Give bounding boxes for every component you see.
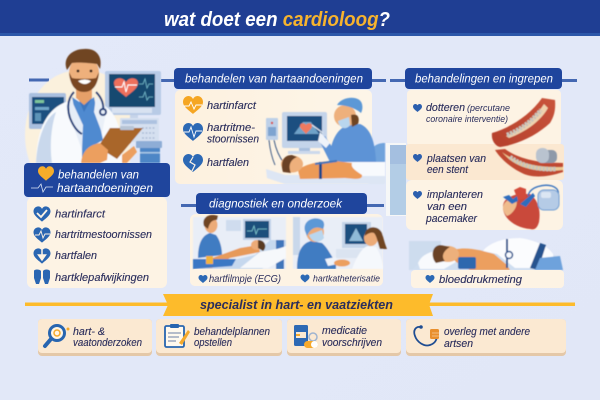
item: hartfalen: hartfalen	[55, 250, 97, 262]
item: plaatsen van een stent	[426, 153, 486, 176]
wall unit and cables	[266, 118, 278, 140]
left monitor	[29, 93, 66, 129]
scan monitor	[342, 222, 371, 248]
wall chart	[226, 220, 241, 231]
icon: stethoscope and folder	[414, 325, 439, 345]
medical cart	[120, 115, 162, 163]
icon: medication	[294, 325, 318, 348]
icon: heart	[300, 274, 310, 283]
illustration: blood pressure measurement	[409, 238, 563, 270]
item: dotteren: dotteren	[426, 102, 465, 114]
item: hartfalen: hartfalen	[207, 157, 249, 169]
item: dotteren: coronaire interventie)	[426, 114, 508, 125]
face	[69, 56, 99, 90]
icon: heart	[413, 104, 422, 112]
item: hartinfarct: hartinfarct	[207, 100, 257, 112]
heading: behandelen van hartaandoeningen	[174, 68, 372, 89]
header band	[0, 0, 600, 36]
card: medicatie voorschrijven	[287, 319, 401, 356]
heading: diagnostiek en onderzoek	[196, 193, 367, 214]
illustration: artery with balloon	[492, 98, 555, 147]
item: hartritmestoornissen: hartritmestoornissen	[55, 229, 152, 241]
icon: heart	[413, 191, 422, 199]
icon: magnifier	[45, 326, 70, 346]
icon: heart with arrow	[34, 248, 50, 264]
item: hartritme-stoornissen: hartritme-	[207, 122, 255, 134]
item: hartinfarct: hartinfarct	[55, 208, 106, 220]
icon: valves	[34, 270, 50, 284]
item: implanteren van een pacemaker	[425, 189, 483, 225]
doctor coat	[36, 97, 122, 163]
item: implanteren van een pacemaker: van een	[427, 201, 467, 213]
heading: behandelingen en ingrepen: behandelingen en ingrepen	[415, 72, 553, 86]
card: hart- en vaatonderzoken: hart- &	[73, 326, 105, 338]
heart monitor	[105, 71, 161, 115]
panel: left conditions list	[27, 197, 167, 288]
icon: orange heart	[183, 96, 203, 114]
nurse	[352, 246, 383, 269]
item: plaatsen van een stent: plaatsen van	[426, 153, 486, 165]
title box: behandelen van hartaandoeningen: hartaandoeningen	[57, 181, 153, 195]
connector lines	[29, 78, 577, 207]
ECG monitor	[243, 219, 271, 240]
patient	[298, 161, 362, 179]
beard	[69, 72, 99, 92]
item: dotteren: (percutane	[467, 103, 510, 114]
doctor	[297, 241, 336, 269]
panel: behandelingen en ingrepen	[406, 90, 564, 230]
title box: behandelen van hartaandoeningen: behandelen van	[58, 168, 139, 182]
card: overleg met andere artsen: artsen	[444, 338, 473, 350]
icon: clipboard with pencil	[165, 324, 190, 347]
icon: heart	[198, 275, 208, 283]
illustration: ECG scene	[193, 215, 286, 269]
title: wat doet een cardioloog?	[164, 8, 390, 31]
icon: blue heart	[183, 123, 203, 141]
item: hartklepafwijkingen: hartklepafwijkingen	[55, 272, 149, 284]
card: overleg met andere artsen: overleg met andere	[444, 326, 530, 338]
patient	[448, 248, 510, 270]
title box: behandelen van hartaandoeningen	[24, 163, 170, 197]
hands	[81, 143, 108, 163]
illustration: echo on patient	[266, 98, 385, 184]
bed	[266, 169, 385, 184]
coat lapels	[66, 97, 83, 150]
bed	[193, 240, 286, 269]
hair	[66, 49, 101, 70]
doctor coat	[483, 238, 555, 268]
panel: blue wall accent	[386, 143, 406, 216]
patient	[193, 245, 260, 268]
icon: heart with check	[34, 206, 50, 222]
heading: behandelingen en ingrepen	[405, 68, 562, 89]
caption: hartkatheterisatie: hartkatheterisatie	[313, 274, 380, 284]
eyes	[77, 70, 92, 72]
neck	[76, 85, 92, 105]
hands	[334, 260, 350, 266]
icon: heart	[426, 275, 434, 283]
card: medicatie voorschrijven: medicatie	[322, 325, 367, 337]
item: hartritme-stoornissen: stoornissen	[207, 134, 259, 146]
item: implanteren van een pacemaker: implanteren	[427, 189, 483, 201]
banner: specialist in hart- en vaatziekten: specialist in hart- en vaatziekten	[200, 298, 393, 312]
card: medicatie voorschrijven: voorschrijven	[322, 337, 382, 349]
icon: heart with pulse	[34, 227, 50, 243]
clipboard	[98, 128, 143, 159]
card: behandelplannen opstellen	[156, 319, 282, 356]
stethoscope	[68, 92, 103, 134]
card: behandelplannen opstellen: opstellen	[194, 337, 232, 349]
banner: specialist in hart- en vaatziekten	[25, 294, 575, 316]
icon: heart	[413, 154, 422, 162]
item: plaatsen van een stent: een stent	[427, 164, 469, 176]
card: behandelplannen opstellen: behandelplannen	[194, 326, 270, 338]
panel: behandelen van hartaandoeningen	[175, 90, 385, 184]
cream circle backdrop	[25, 70, 130, 163]
surgeon body	[329, 124, 376, 162]
surgeon head	[334, 105, 356, 127]
illustration: cardiologist with monitors	[25, 49, 162, 163]
panel: diagnostiek en onderzoek	[190, 214, 387, 286]
illustration: heart with pacemaker	[503, 185, 559, 229]
item: dotteren	[426, 102, 510, 125]
stethoscope	[506, 239, 508, 268]
item: implanteren van een pacemaker: pacemaker	[425, 213, 478, 225]
caption bar	[190, 269, 383, 286]
chair	[368, 143, 385, 163]
heading: diagnostiek en onderzoek: diagnostiek en onderzoek	[209, 196, 343, 210]
card: hart- en vaatonderzoken	[38, 319, 152, 356]
heading: behandelen van hartaandoeningen: behandelen van hartaandoeningen	[185, 72, 363, 86]
item: hartritme-stoornissen	[207, 122, 259, 146]
illustration: stent with device	[495, 148, 563, 176]
card: hart- en vaatonderzoken: vaatonderzoken	[73, 337, 142, 349]
caption: hartfilmpje: hartfilmpje (ECG)	[209, 273, 281, 285]
icon: orange heart with pulse	[31, 166, 54, 192]
icon: broken heart	[183, 154, 203, 172]
card: overleg met andere artsen	[406, 319, 566, 356]
bed back	[409, 241, 441, 270]
ultrasound monitor	[282, 112, 327, 148]
pillow	[418, 250, 456, 269]
shirt	[72, 97, 103, 163]
illustration: catheterisation scene	[293, 217, 387, 269]
caption: bloeddrukmeting: bloeddrukmeting	[439, 274, 523, 286]
technician	[198, 233, 222, 258]
caption: bloeddrukmeting	[411, 270, 564, 288]
